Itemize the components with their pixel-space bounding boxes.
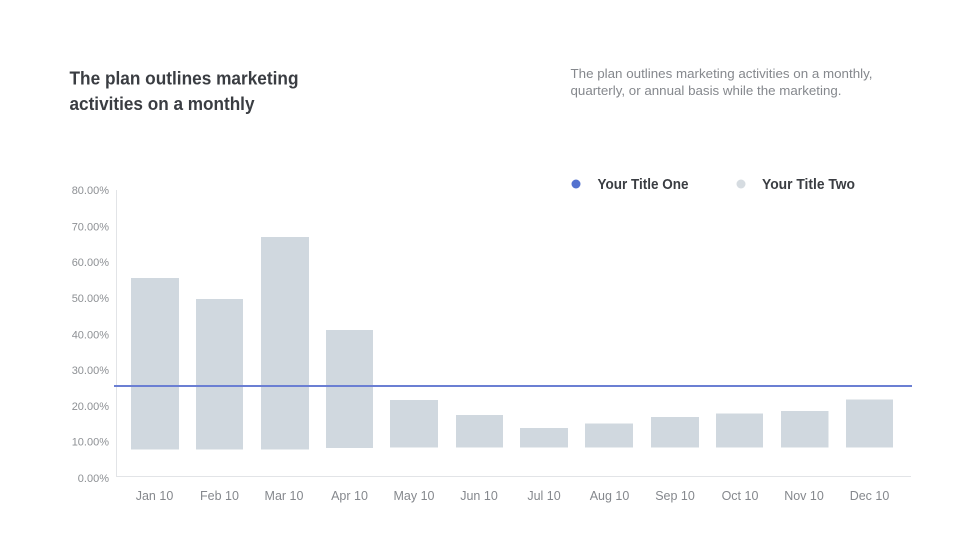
x-axis labels: Apr 10: [331, 489, 368, 503]
y-axis labels: 40.00%: [72, 330, 109, 342]
description text: [570, 66, 872, 98]
y-axis labels: 30.00%: [72, 365, 109, 377]
y-axis labels: 20.00%: [72, 401, 109, 413]
x-axis labels: May 10: [394, 489, 435, 503]
chart: [72, 185, 912, 503]
x-axis labels: Sep 10: [655, 489, 695, 503]
legend: [572, 177, 855, 193]
line: Your Title One: [114, 385, 912, 387]
x-axis labels: Aug 10: [590, 489, 629, 503]
x-axis labels: [136, 489, 889, 503]
x-axis labels: Jun 10: [460, 489, 498, 503]
title: The plan outlines marketing: [70, 68, 298, 88]
x-axis labels: Jul 10: [527, 489, 561, 503]
axes: [116, 190, 911, 476]
title: [70, 68, 298, 114]
x-axis labels: Feb 10: [200, 489, 239, 503]
x-axis labels: Oct 10: [722, 489, 758, 503]
x-axis labels: Jan 10: [136, 489, 173, 503]
y-axis labels: 10.00%: [72, 436, 109, 448]
x-axis labels: Mar 10: [265, 489, 303, 503]
y-axis labels: 60.00%: [72, 257, 109, 269]
y-axis labels: 50.00%: [72, 293, 109, 305]
y-axis labels: 80.00%: [72, 185, 109, 197]
description text: The plan outlines marketing activities on a monthly,: [570, 66, 872, 81]
bars: Your Title Two: [131, 237, 893, 450]
x-axis labels: Nov 10: [784, 489, 824, 503]
legend item: Your Title Two: Your Title Two: [762, 177, 855, 193]
legend item: Your Title One: Your Title One: [598, 177, 688, 193]
y-axis labels: [72, 185, 109, 485]
y-axis labels: 70.00%: [72, 222, 109, 234]
description text: quarterly, or annual basis while the marketing.: [570, 83, 842, 98]
x-axis labels: Dec 10: [850, 489, 889, 503]
y-axis labels: 0.00%: [78, 473, 109, 485]
title: activities on a monthly: [70, 93, 255, 114]
